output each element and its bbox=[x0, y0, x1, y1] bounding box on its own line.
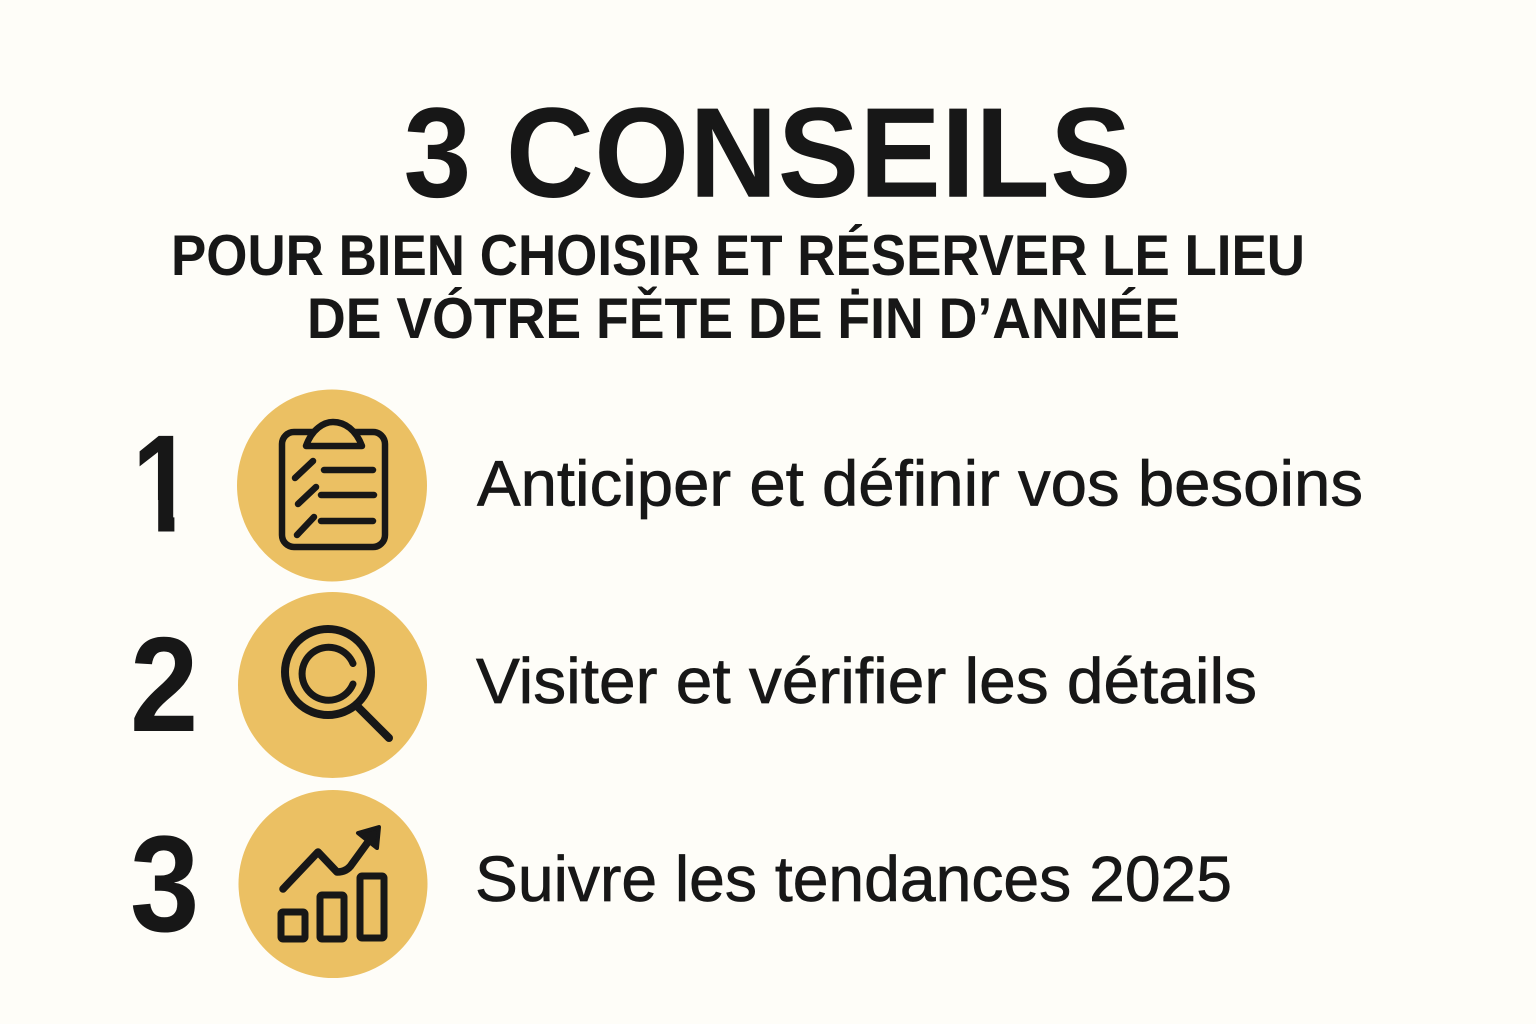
label 3: Suivre les tendances 2025 bbox=[475, 843, 1232, 915]
label 2: Visiter et vérifier les détails bbox=[476, 645, 1257, 717]
label 1: Anticiper et définir vos besoins bbox=[477, 448, 1363, 520]
number 3: 3 bbox=[130, 807, 199, 960]
title: 3 CONSEILS bbox=[404, 81, 1132, 224]
icon: magnifying glass bbox=[238, 592, 427, 778]
subtitle: POUR BIEN CHOISIR ET RÉSERVER LE LIEU bbox=[171, 223, 1305, 288]
icon: growth chart bbox=[238, 790, 428, 978]
icon: clipboard checklist bbox=[237, 390, 427, 582]
tip 1 bbox=[132, 390, 1363, 582]
subtitle bbox=[171, 223, 1305, 351]
tip 3 bbox=[130, 790, 1232, 978]
number 2: 2 bbox=[130, 610, 198, 760]
subtitle: DE VÓTRE FĚTE DE ḞIN D’ANNÉE bbox=[307, 286, 1180, 351]
number 1: 1 bbox=[132, 406, 194, 561]
tip 2 bbox=[130, 592, 1257, 778]
